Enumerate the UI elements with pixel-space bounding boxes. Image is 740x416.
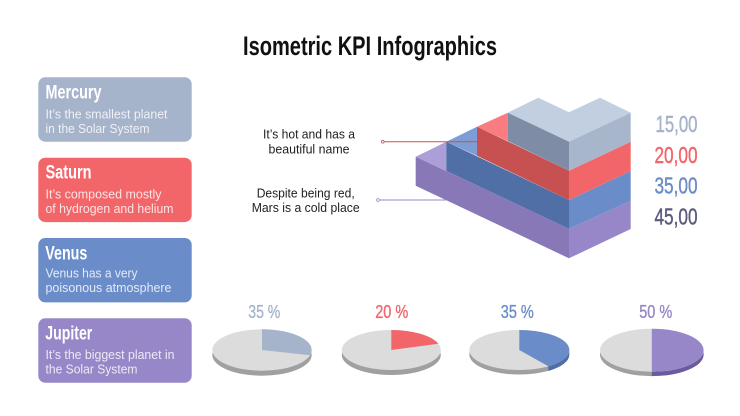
panel: Venus: Venus has a very bbox=[46, 266, 138, 280]
layer: blue bbox=[446, 127, 631, 229]
pie: 20 percent red bbox=[342, 301, 441, 375]
panel: Saturn: It’s composed mostly bbox=[46, 188, 162, 202]
pie: 35 percent blue bbox=[469, 301, 569, 374]
panel: Mercury bbox=[38, 77, 192, 142]
panel: Saturn: Saturn bbox=[46, 162, 92, 184]
panel: Mercury: It’s the smallest planet bbox=[46, 107, 168, 121]
callout: Mars: Despite being red, bbox=[257, 186, 355, 200]
values: 15,00 bbox=[656, 111, 698, 137]
panel: Venus: Venus bbox=[45, 244, 87, 264]
callout: Mars bbox=[252, 186, 446, 215]
callout: hot and beautiful: It’s hot and has a bbox=[263, 128, 355, 142]
callout: hot and beautiful bbox=[263, 128, 477, 156]
pie: 20 percent red: 20 % bbox=[375, 301, 408, 322]
pie: 35 percent slate: 35 % bbox=[248, 301, 280, 322]
panel: Saturn: of hydrogen and helium bbox=[46, 202, 174, 216]
panel: Jupiter bbox=[38, 318, 192, 383]
values: 35,00 bbox=[654, 173, 698, 199]
panel: Venus: poisonous atmosphere bbox=[46, 281, 172, 295]
values bbox=[654, 111, 698, 230]
isometric stacked chart bbox=[416, 98, 631, 258]
panel: Mercury: Mercury bbox=[46, 82, 102, 104]
panel: Jupiter: the Solar System bbox=[46, 363, 138, 377]
panel: Mercury: in the Solar System bbox=[46, 122, 150, 136]
panel: Saturn bbox=[38, 158, 192, 222]
values: 20,00 bbox=[654, 142, 698, 168]
pie: 35 percent slate bbox=[212, 301, 312, 376]
pie: 50 percent purple: 50 % bbox=[639, 301, 672, 322]
layer: purple bbox=[416, 142, 631, 258]
values: 45,00 bbox=[654, 204, 698, 230]
panel: Jupiter: Jupiter bbox=[45, 324, 93, 344]
layer: slate bbox=[508, 98, 631, 171]
panel: Jupiter: It’s the biggest planet in bbox=[46, 348, 175, 362]
callout: Mars: Mars is a cold place bbox=[252, 201, 360, 215]
pie: 35 percent blue: 35 % bbox=[501, 301, 534, 322]
pie: 50 percent purple bbox=[600, 301, 704, 376]
layer: red bbox=[477, 113, 631, 200]
title: Isometric KPI Infographics bbox=[243, 31, 497, 61]
panel: Venus bbox=[38, 238, 192, 302]
callout: hot and beautiful: beautiful name bbox=[268, 142, 350, 156]
